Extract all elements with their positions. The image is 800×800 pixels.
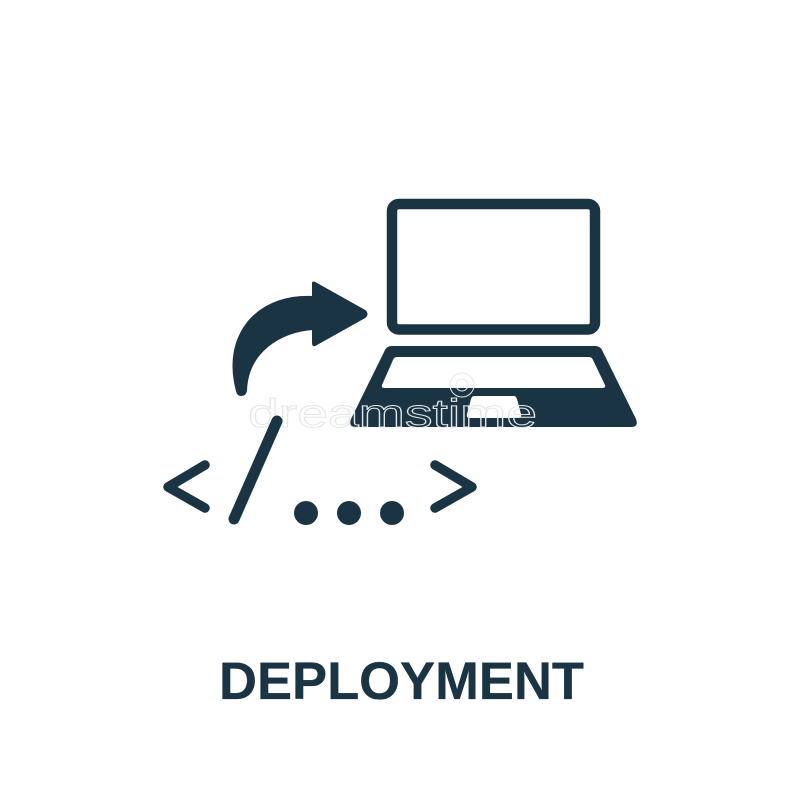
- icon: three dots: [294, 501, 404, 525]
- title: DEPLOYMENT: [219, 652, 584, 711]
- icon: greater-than bracket: [435, 465, 472, 508]
- icon: curved arrow: [233, 282, 366, 395]
- watermark: dreamstime: [248, 392, 537, 436]
- icon: slash: [234, 421, 277, 519]
- watermark: [248, 373, 537, 436]
- laptop screen: [392, 204, 595, 330]
- laptop base: [350, 346, 637, 427]
- icon: less-than bracket: [168, 465, 205, 508]
- icon: laptop: [350, 204, 637, 427]
